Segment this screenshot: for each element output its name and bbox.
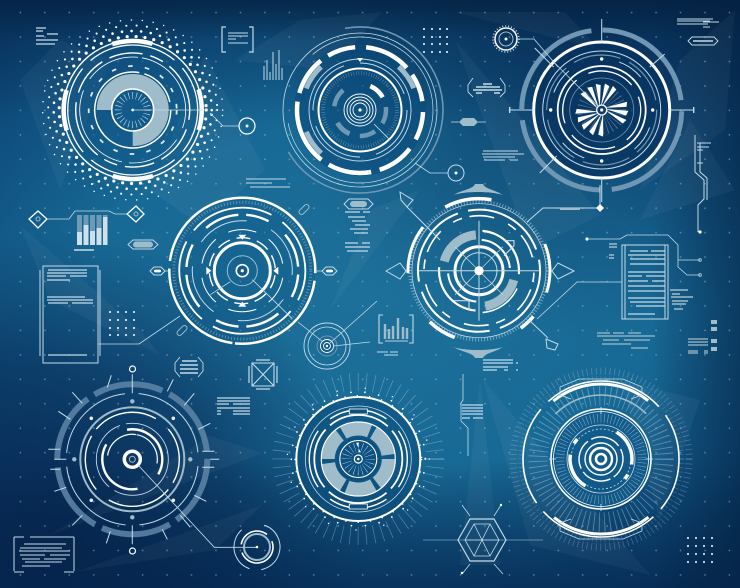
connector and small ring for gauge 1 [210, 113, 255, 134]
text lines near gauge 2 bottom [246, 179, 290, 187]
pill middle left [128, 240, 158, 249]
text lines top right [677, 19, 719, 27]
gauge 5: crosshair dial middle [379, 171, 579, 371]
gauge 1: halftone dial top left [37, 15, 228, 205]
pill above text column [344, 199, 373, 209]
text block top left [36, 28, 58, 44]
small label under chart [377, 352, 398, 355]
dot matrix left [109, 311, 135, 336]
small radar bottom [228, 518, 286, 576]
grey arc sectors [435, 227, 523, 315]
bar chart middle left [74, 215, 108, 250]
small radar middle [298, 301, 377, 369]
pins of gauge 6 [130, 366, 136, 554]
inner arcs [325, 75, 395, 145]
connector document to gauge 4 [98, 316, 180, 344]
pill marker [451, 118, 486, 126]
gauge 7: bottom centre radial dial [281, 382, 435, 536]
gauge 8: bottom right ticked dial [491, 349, 711, 569]
hex pill top right [688, 37, 718, 45]
grey segments [328, 429, 388, 489]
connector and small ring for gauge 2 [415, 163, 464, 181]
text snippets around right document [609, 244, 693, 309]
text block right edge [688, 320, 717, 353]
dot matrix top [423, 28, 448, 53]
circuit right side [695, 135, 711, 234]
hexagon icon bottom [423, 504, 543, 574]
outer white segments [281, 31, 439, 189]
text lines centre top [482, 151, 524, 160]
bracket text block centre top [468, 78, 505, 97]
document right with connectors [537, 235, 701, 319]
text block lower middle [217, 398, 250, 414]
grey sector [104, 82, 161, 138]
halftone dot halo [37, 15, 228, 205]
bottom left text panel [14, 537, 74, 572]
text column middle [345, 212, 370, 251]
gauge 6: bottom left dial [48, 374, 257, 547]
thin bar chart top [264, 50, 282, 80]
concentric centre [344, 94, 376, 126]
connector from gauge 5 to gauge 3 [527, 185, 604, 222]
side pills of gauge 4 [150, 203, 337, 337]
bracket bar chart [379, 315, 413, 343]
gauge 4: middle left dial [154, 182, 331, 359]
small radar above gauge 3 [493, 26, 558, 67]
bracket text block lower [175, 357, 203, 377]
text block and trunk lower centre [461, 360, 518, 456]
satellite markers of gauge 5 [386, 184, 574, 358]
bracket text block top [222, 27, 253, 52]
outer rings [41, 18, 224, 202]
document left [40, 266, 100, 363]
dot matrix bottom right [687, 537, 713, 563]
text block below right document [597, 333, 655, 348]
gauge 2: segmented dial top centre [257, 7, 463, 213]
gauge 3: turbine dial top right [510, 19, 694, 202]
turbine blades [587, 95, 617, 125]
diamond left with line [29, 206, 144, 228]
crossed box icon [249, 360, 277, 389]
centre dial [112, 89, 154, 131]
